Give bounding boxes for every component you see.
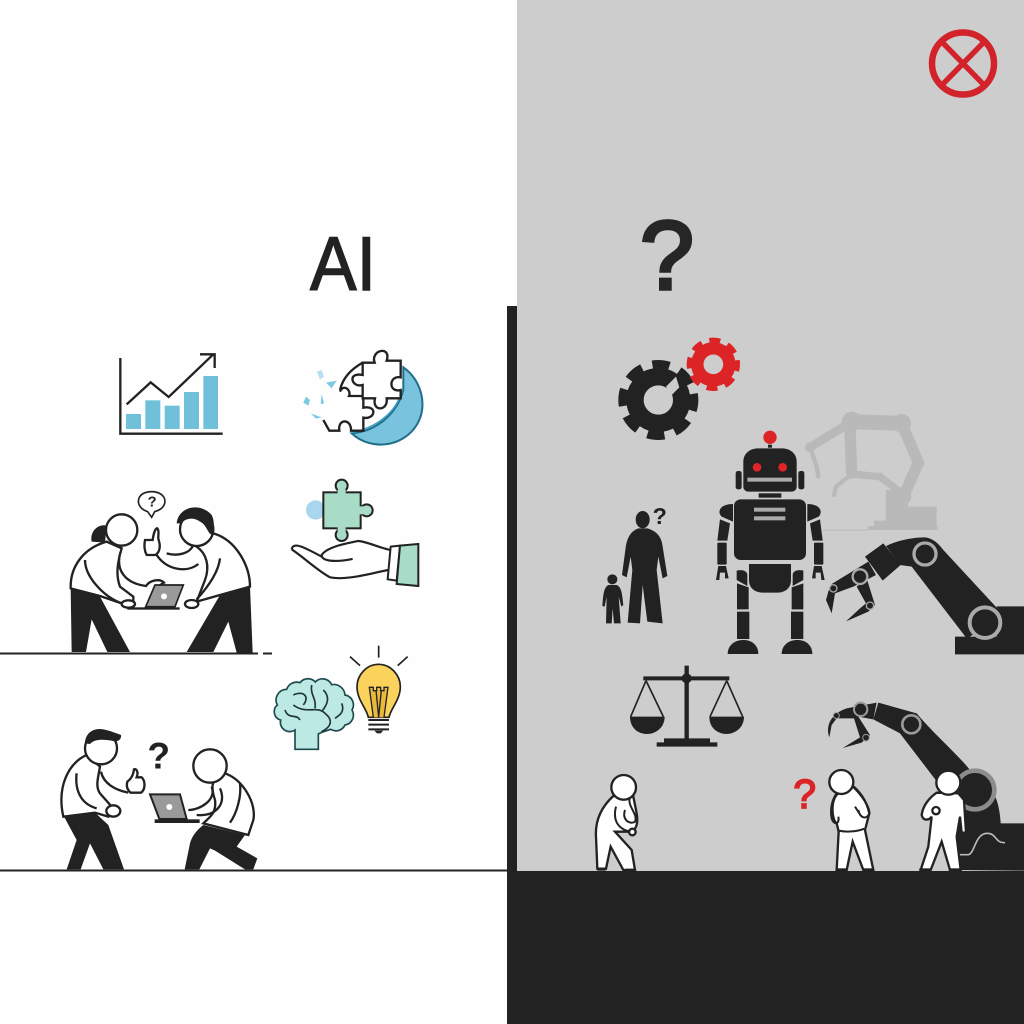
icon: robot: [716, 431, 825, 654]
hand holding puzzle icon: [292, 480, 418, 586]
people collaborating at laptop: ?: [148, 495, 157, 511]
heading: AI: AI: [310, 222, 376, 307]
white figure head in hands: [829, 770, 874, 871]
icon: balance scales: [630, 666, 744, 747]
laptop: [146, 585, 183, 607]
icon: red cross circle: [932, 32, 994, 94]
question mark: ?: [147, 734, 170, 776]
red question mark: ?: [793, 771, 816, 817]
right person head and hair: [180, 513, 213, 546]
group: right lower scene: [596, 666, 1024, 871]
thumbs up: [144, 528, 160, 555]
speech bubble: [138, 492, 165, 517]
centre divider bar: [507, 306, 517, 872]
group: upper left icons and people: [71, 351, 422, 653]
floor line left upper: [0, 652, 272, 654]
floor line left lower: [0, 870, 507, 872]
people collaborating at laptop: [71, 492, 253, 653]
lightbulb icon: [350, 646, 408, 733]
dark floor: [507, 871, 1024, 1024]
left person torso: [71, 542, 133, 607]
icon: red gear: [686, 337, 740, 391]
white figure thinking left: [596, 775, 637, 871]
icon: grey background robotic arm: [805, 412, 938, 531]
right person torso: [197, 533, 250, 602]
thumbs up: [127, 769, 144, 793]
bar chart icon: [120, 354, 223, 434]
brain icon: [274, 679, 353, 749]
group: lower left icons and people: [61, 646, 408, 869]
panel: grey right side: [517, 0, 1024, 872]
heading: question mark: ?: [640, 201, 694, 310]
icon: adult and child silhouettes: [602, 503, 667, 623]
person seated at laptop: [185, 749, 257, 869]
icon: black robotic arm behind people: [828, 703, 1024, 871]
laptop: [150, 794, 187, 819]
icon: black robotic arm with gripper: [826, 537, 1024, 654]
icon: black gear: [618, 360, 698, 440]
icon: adult and child silhouettes: ?: [653, 503, 667, 529]
left person head: [106, 514, 137, 546]
person with thumbs up: [61, 729, 144, 869]
white figure gesturing: [919, 771, 966, 871]
puzzle and crescent icon: [303, 351, 422, 445]
group: right upper machines: [602, 337, 1024, 654]
